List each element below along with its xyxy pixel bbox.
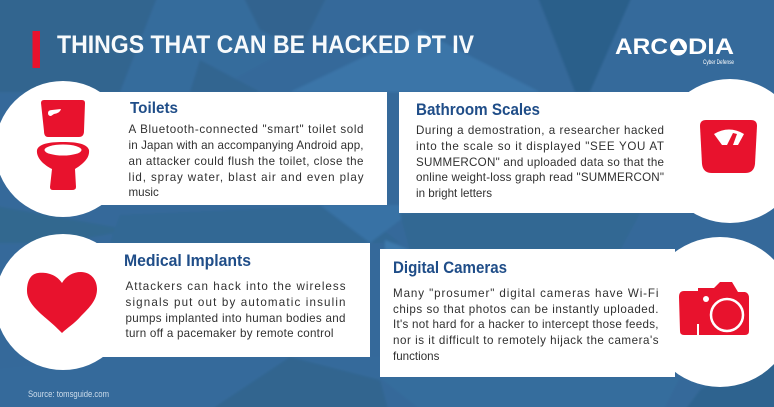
text: medical implants body: pumps implanted into human bodies and (126, 312, 346, 325)
text: toilets body: A Bluetooth-connected "smart" toilet sold (128, 123, 364, 136)
heading: toilets: Toilets (130, 100, 178, 117)
text: digital cameras body: functions (393, 350, 440, 363)
icon: heart (27, 272, 97, 333)
icon: toilet (37, 100, 89, 190)
text: bathroom scales body (416, 124, 664, 200)
text: digital cameras body: It's not hard for a hacker to intercept those feeds, (393, 318, 658, 331)
panel: toilets (0, 81, 387, 217)
text: medical implants body: signals put out by automatic insulin (126, 296, 346, 309)
text: toilets body (128, 123, 364, 199)
text: toilets body: lid, spray water, blast air and even play (128, 171, 364, 184)
text: digital cameras body: Many "prosumer" digital cameras have Wi-Fi (393, 287, 658, 300)
title: THINGS THAT CAN BE HACKED PT IV (57, 31, 474, 59)
text: bathroom scales body: During a demostration, a researcher hacked (416, 124, 664, 137)
text: bathroom scales body: into the scale so it displayed "SEE YOU AT (416, 140, 664, 153)
heading: digital cameras: Digital Cameras (393, 258, 507, 277)
logo: Arcadia Cyber Defense: ARC (615, 34, 668, 59)
panel: medical implants (0, 234, 370, 370)
text: medical implants body: Attackers can hack into the wireless (126, 280, 346, 293)
text: bathroom scales body: online weight-loss graph read "SUMMERCON" (416, 171, 664, 184)
text: medical implants body: turn off a pacemaker by remote control (126, 327, 334, 340)
title accent bar (32, 31, 40, 68)
logo: Arcadia Cyber Defense (615, 34, 735, 66)
text: bathroom scales body: SUMMERCON" and uploaded data so that the (416, 156, 664, 169)
source note: Source: tomsguide.com (28, 389, 109, 399)
text: digital cameras body: chips so that photos can be instantly uploaded. (393, 303, 658, 316)
heading: bathroom scales: Bathroom Scales (416, 100, 540, 119)
text: toilets body: music (128, 186, 159, 199)
heading: medical implants: Medical Implants (124, 251, 251, 270)
text: digital cameras body (393, 287, 659, 363)
logo: Arcadia Cyber Defense: Cyber Defense (703, 60, 735, 66)
panel: bathroom scales (399, 79, 774, 223)
text: toilets body: in Japan with an accompanying Android app, (128, 139, 364, 152)
logo: Arcadia Cyber Defense: DIA (688, 34, 734, 59)
panel: digital cameras (380, 237, 774, 387)
text: toilets body: an attacker could flush the toilet, close the (128, 155, 364, 168)
icon: scale (700, 120, 757, 173)
icon: camera (679, 282, 749, 335)
text: bathroom scales body: in bright letters (416, 187, 492, 200)
text: medical implants body (126, 280, 346, 340)
text: digital cameras body: nor is it difficult to remotely hijack the camera's (393, 334, 659, 347)
